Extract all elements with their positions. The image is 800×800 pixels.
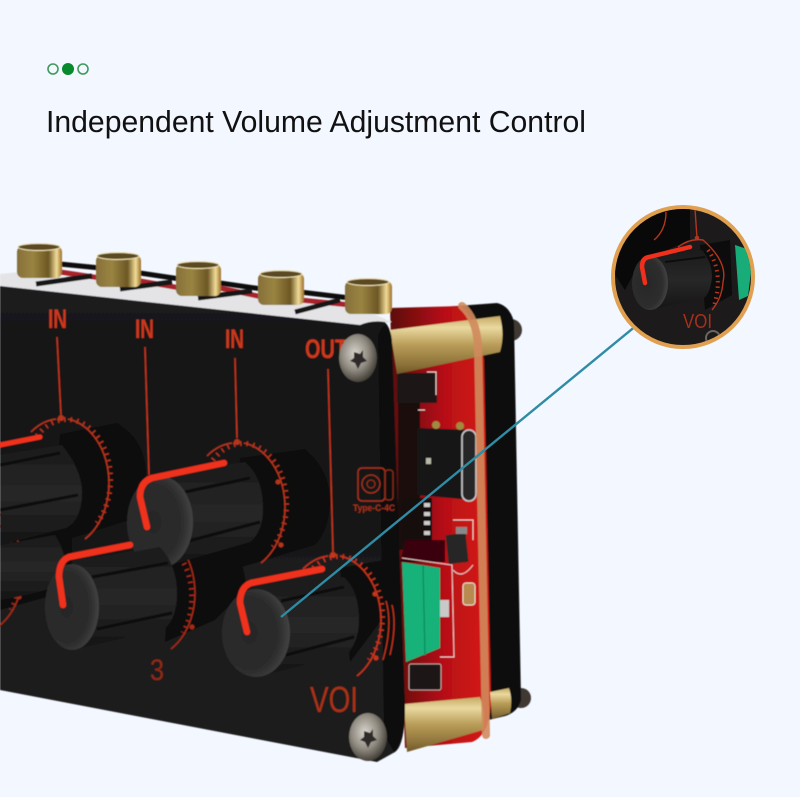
pointer line: [281, 325, 637, 617]
panel label: VOL: VOI: [310, 679, 358, 720]
dial: knob 0: [0, 506, 23, 626]
circuit board: [390, 306, 491, 748]
title: Independent Volume Adjustment Control: [46, 105, 586, 139]
diode: [446, 527, 469, 564]
led: [463, 583, 475, 605]
signal lines: [57, 337, 333, 552]
dial: knob 2: [207, 439, 286, 563]
type-c icon: [353, 468, 395, 513]
magnified callout: [612, 207, 753, 347]
volume knob: [222, 569, 359, 677]
callout green switch: [735, 245, 751, 300]
rear knob cylinders: [0, 423, 385, 662]
panel label: OUT: OUT: [305, 334, 347, 364]
dial: knob 1: [31, 415, 110, 539]
callout screw: [705, 330, 720, 341]
small component: [409, 664, 441, 690]
callout knob pointer: [642, 247, 690, 283]
callout dark recess: [612, 208, 690, 290]
panel label: IN 2: IN: [135, 314, 154, 344]
knob 3: [45, 545, 177, 650]
dial: volume knob: [303, 552, 394, 676]
progress dots: [48, 63, 88, 75]
wires: [36, 264, 350, 312]
panel label: IN 3: IN: [225, 324, 244, 354]
usb-c port: [417, 421, 476, 501]
knob 0 (cropped lower left): [0, 535, 66, 600]
callout label: VOI: [683, 311, 712, 333]
gold standoff bottom: [404, 688, 511, 752]
rear panel: [430, 303, 531, 722]
knob 1 (cropped upper left): [0, 437, 82, 545]
screw top: [339, 334, 377, 382]
front panel: [0, 286, 405, 762]
panel side bevel: [378, 325, 405, 752]
knob 2: [127, 462, 263, 568]
callout rear cylinder: [700, 240, 732, 310]
panel label: IN 1: IN: [48, 304, 67, 334]
callout dial: [654, 209, 724, 310]
device photo illustration: [0, 244, 531, 762]
dial: knob 3: [154, 529, 195, 649]
top silver plate: [0, 272, 392, 328]
panel label: 3: 3: [150, 654, 164, 687]
type-c icon: Type-C-4C: [353, 503, 395, 513]
gold standoff top: [390, 316, 502, 374]
callout knob: [666, 250, 712, 298]
ic chip: [402, 498, 432, 540]
green switch: [402, 562, 449, 662]
audio jacks: [17, 244, 392, 314]
screw bottom: [349, 713, 387, 761]
acrylic edge: [462, 306, 486, 735]
